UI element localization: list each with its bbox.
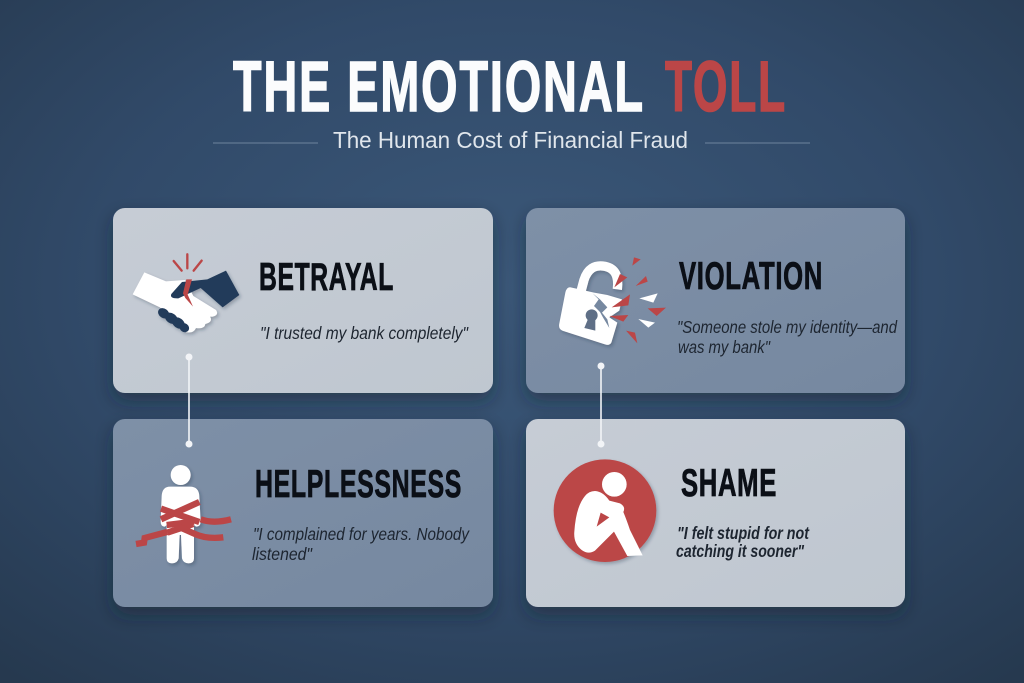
connector: betrayal to helplessness	[186, 354, 192, 448]
heading: shame: SHAME	[681, 462, 777, 505]
icon: broken handshake	[133, 254, 239, 334]
icon: shattered padlock	[559, 257, 666, 345]
icon: figure curled up in red circle	[554, 459, 656, 562]
quote: violation: was my bank"	[678, 337, 771, 357]
heading: betrayal: BETRAYAL	[259, 256, 394, 299]
panel: shame	[526, 419, 905, 607]
title: TOLL	[665, 48, 787, 127]
panel: violation	[526, 208, 905, 393]
quote: helplessness: listened"	[252, 544, 313, 564]
quote: shame: catching it sooner"	[676, 541, 805, 561]
panel: betrayal	[113, 208, 493, 393]
title: THE EMOTIONAL	[233, 48, 645, 127]
connector: violation to shame	[598, 362, 604, 448]
quote: betrayal: "I trusted my bank completely"	[260, 323, 469, 343]
quote: shame: "I felt stupid for not	[677, 523, 810, 543]
heading: helplessness: HELPLESSNESS	[255, 463, 462, 506]
quote: helplessness: "I complained for years. Nobody	[253, 524, 470, 544]
panel: helplessness	[113, 419, 493, 607]
quote: violation: "Someone stole my identity—and	[677, 317, 898, 337]
heading: violation: VIOLATION	[679, 255, 823, 298]
subtitle: The Human Cost of Financial Fraud	[333, 127, 688, 153]
icon: figure bound by red tape	[136, 465, 231, 563]
